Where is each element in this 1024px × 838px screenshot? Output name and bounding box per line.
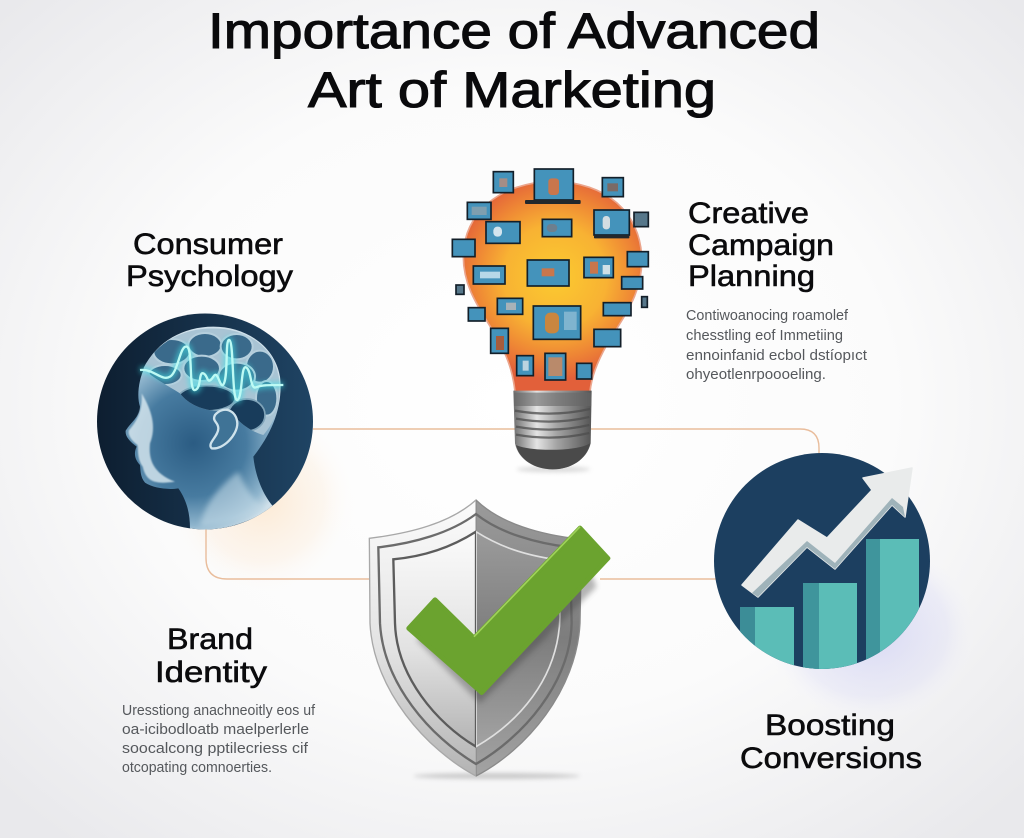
heading: brand identity: Identity [155,656,267,689]
icon: head with brain wave [97,314,313,530]
heading: creative campaign planning: Planning [688,260,815,293]
face highlights [129,393,175,483]
title [208,3,820,118]
text block: campaign description: chesstling eof Immetiing [686,328,843,344]
head silhouette [126,327,281,530]
text block: campaign description: Contiwoanocing roamolef [686,308,849,324]
icon: shield with green check [369,500,608,779]
heading: creative campaign planning: Campaign [688,229,834,262]
icon: growth chart with arrow [714,453,930,679]
bulb screw base [513,391,592,469]
text block: brand description: otcopating comnoerties. [122,760,272,776]
shield body [369,500,582,776]
heading: creative campaign planning [688,197,834,293]
arrow [742,468,912,597]
heading: boosting conversions: Boosting [765,709,895,742]
brain lobes [144,328,280,435]
bar chart [740,539,919,679]
heading: boosting conversions [740,709,922,775]
floating screens [452,169,648,380]
panel: consumer psychology [97,228,313,530]
text block: brand description [122,703,316,776]
icon: light bulb with screens [452,169,648,472]
bulb glass [463,182,642,392]
screen details [472,178,618,376]
text block: brand description: Uresstiong anachneoitly eos uf [122,703,316,719]
text block: campaign description: ohyeotlenrpoooeling. [686,367,826,383]
connector lines [206,429,819,579]
text block: campaign description: ennoinfanid ecbol dstíopıct [686,348,867,364]
heading: consumer psychology: Psychology [126,260,293,293]
text block: brand description: oa-icibodloatb maelperlerle [122,722,309,738]
heading: consumer psychology [126,228,293,293]
check shadow [417,550,597,703]
title: Art of Marketing [308,62,716,118]
text block: brand description: soocalcong pptilecriess cif [122,741,309,757]
panel: boosting conversions [714,453,930,775]
laptop bases [525,200,629,238]
panel: creative campaign planning [686,197,867,383]
brain wave [140,340,283,400]
heading: creative campaign planning: Creative [688,197,809,230]
green check [409,528,608,693]
heading: boosting conversions: Conversions [740,742,922,775]
text block: campaign description [686,308,867,383]
heading: consumer psychology: Consumer [133,228,283,261]
ear [210,410,237,448]
heading: brand identity: Brand [167,623,253,656]
heading: brand identity [155,623,267,689]
panel: brand identity [122,623,316,776]
title: Importance of Advanced [208,3,820,59]
